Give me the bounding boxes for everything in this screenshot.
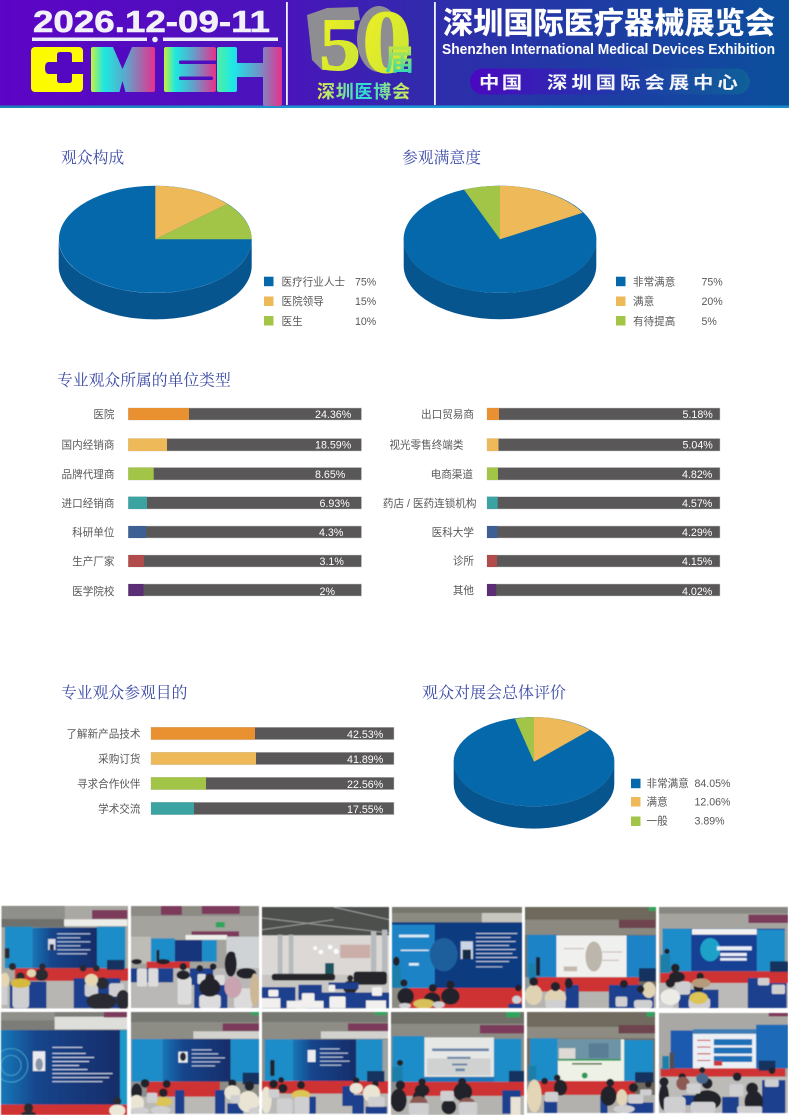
photo 5 [524,906,657,1009]
panel: audience composition [59,149,377,328]
numeral 5: 5 [319,4,361,87]
letter E: E [166,38,214,103]
legend: 医生 [282,315,303,328]
divider right [434,2,436,105]
bar chart right: 医科大学 [432,526,474,539]
legend: 75% [702,276,723,288]
session character: 届 [385,45,414,77]
photo 11 [526,1011,656,1114]
panel: visit satisfaction [402,149,723,328]
photo 12 [658,1012,788,1114]
bar chart right: 4.29% [682,527,713,539]
CMEH logo [31,38,282,106]
photo 4 [391,906,523,1009]
english name: Shenzhen International Medical Devices Exhibition [442,42,775,58]
letter H [217,38,282,106]
heading: 专业观众参观目的 [61,684,188,702]
bar chart left: 科研单位 [72,526,115,539]
panel: event photos [0,906,788,1115]
bar chart right: 5.04% [682,440,713,452]
bar chart left: 医学院校 [72,585,115,598]
legend: 5% [702,316,717,328]
panel: visit purpose [61,684,394,816]
heading: 参观满意度 [402,149,481,167]
bar chart right: 其他 [453,584,474,597]
bar chart left [62,408,362,598]
bar chart left: 国内经销商 [62,438,114,452]
photo 10 [390,1011,525,1115]
bar chart left: 24.36% [315,409,352,421]
bar chart left: 4.3% [319,527,344,539]
bar chart left: 品牌代理商 [62,468,114,481]
bar chart right: 5.18% [682,409,713,421]
heading: 观众对展会总体评价 [422,684,566,702]
bar chart right: 电商渠道 [431,468,473,481]
bar chart right: 4.82% [682,469,713,481]
venue pill [470,68,750,94]
legend: 75% [355,276,377,288]
photo 7 [0,1011,128,1115]
date underline [32,37,278,42]
panel: overall evaluation [422,684,731,829]
bar chart right: 诊所 [453,554,474,568]
heading: 观众构成 [61,149,124,167]
bar chart left: 医院 [93,408,115,421]
legend: 15% [355,296,377,308]
photo 8 [130,1011,260,1114]
bar chart: 17.55% [347,804,384,816]
pie chart [454,717,614,829]
bar chart left: 生产厂家 [72,555,115,568]
legend: 医院领导 [282,295,324,308]
date: 2026.12-09-11 [33,4,270,39]
venue pill: 中国 [479,73,522,92]
photo 3 [261,906,390,1010]
photo 6 [658,906,788,1009]
bar chart right: 4.57% [682,498,713,510]
letter C: C [34,38,80,101]
bar chart left: 3.1% [320,556,344,568]
legend [631,777,731,828]
bar chart: 42.53% [347,729,384,741]
legend: 10% [355,316,377,328]
panel: organisation types [57,372,720,598]
bar chart [66,727,394,816]
photo 1 [0,906,129,1010]
bar chart: 22.56% [347,779,384,791]
photo 2 [130,906,260,1009]
bar chart right: 出口贸易商 [421,408,474,421]
bar chart left: 进口经销商 [62,497,114,510]
bar chart: 了解新产品技术 [66,728,141,740]
bar chart left: 8.65% [315,469,346,481]
legend [616,276,723,328]
pie chart [404,186,596,319]
bar chart: 41.89% [347,754,384,766]
bar chart right [383,408,720,598]
legend: 医疗行业人士 [282,276,345,288]
legend: 非常满意 [646,777,689,790]
legend: 20% [702,296,723,308]
bar chart: 采购订货 [98,752,140,766]
divider left [286,2,288,105]
legend: 非常满意 [633,276,675,288]
legend: 12.06% [694,796,731,808]
short name: 深圳医博会 [317,82,410,102]
bar chart right: 药店 / 医药连锁机构 [383,497,476,510]
legend: 一般 [646,814,668,828]
letter M: M [92,38,154,103]
legend: 有待提高 [633,315,675,328]
legend: 3.89% [694,816,725,828]
legend [264,276,377,328]
letter H: H [218,38,282,103]
heading: 专业观众所属的单位类型 [57,372,231,390]
legend: 满意 [633,295,654,308]
bar chart: 寻求合作伙伴 [77,778,141,790]
bar chart right: 4.15% [682,556,713,568]
bar chart right: 视光零售终端类 [389,438,464,452]
bar chart left: 6.93% [320,498,350,510]
legend: 84.05% [694,778,731,790]
bar chart left: 2% [320,586,335,598]
legend: 满意 [646,796,668,808]
bar chart left: 18.59% [315,440,352,452]
pie chart [59,186,252,319]
bar chart right: 4.02% [682,586,713,598]
venue pill: 深圳国际会展中心 [547,73,738,92]
photo 9 [261,1011,389,1114]
exhibition name: 深圳国际医疗器械展览会 [443,8,775,40]
50th session emblem [307,0,414,102]
bar chart: 学术交流 [98,802,141,816]
header banner [0,0,789,108]
emblem extruded shadow [307,6,401,72]
